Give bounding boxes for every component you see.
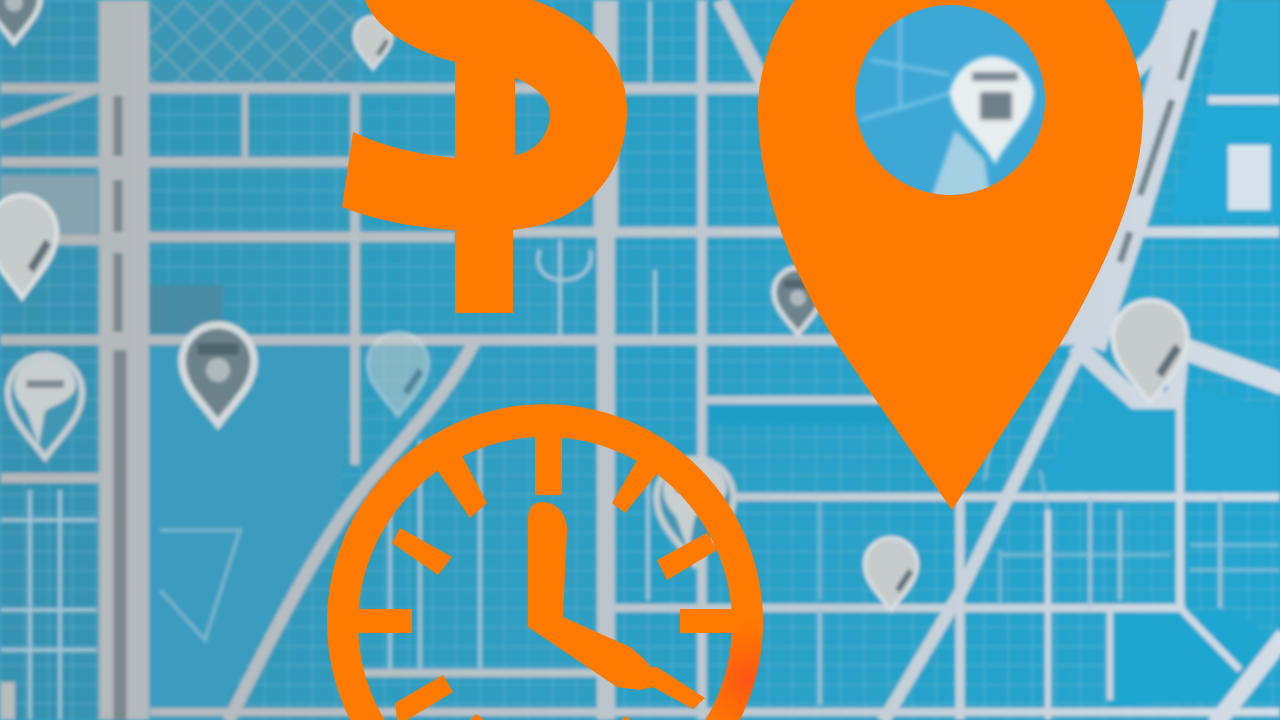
clock hands (528, 502, 705, 709)
pin body (758, 0, 1143, 510)
clock ring (327, 404, 763, 720)
map pins (0, 0, 1187, 610)
clock ticks (350, 425, 740, 720)
icon: clock (327, 404, 763, 720)
icon: location pin (758, 0, 1143, 510)
icon: dollar sign (342, 0, 627, 313)
pin window detail (852, 0, 1048, 200)
